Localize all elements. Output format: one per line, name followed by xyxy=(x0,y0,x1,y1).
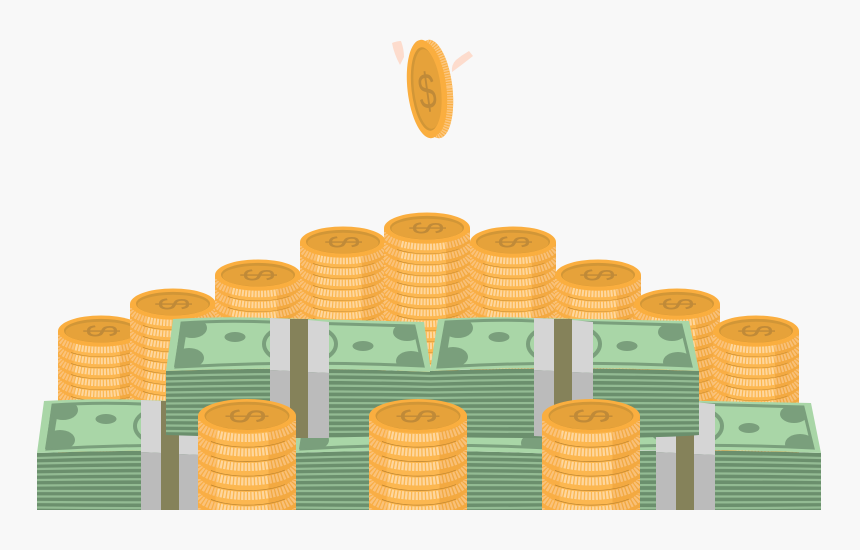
coin stack 1: $ xyxy=(76,325,126,337)
coin edge xyxy=(410,38,458,140)
coin stack 2 xyxy=(130,288,216,451)
coin stack 6 xyxy=(470,226,556,389)
coin inner ring xyxy=(407,46,445,132)
icon: flipping coin xyxy=(392,38,473,140)
coin stack 9: $ xyxy=(731,325,781,337)
coin stack 3 xyxy=(215,260,301,422)
coin stack 5 centre: $ xyxy=(402,222,452,234)
front coin stack left: $ xyxy=(218,409,276,423)
front coin stack middle xyxy=(369,399,467,549)
front coin stack right xyxy=(542,399,640,549)
front coin stack middle: $ xyxy=(389,409,447,423)
front coin stack right: $ xyxy=(562,409,620,423)
coin inner face xyxy=(410,48,445,130)
coin stack 3: $ xyxy=(233,269,283,281)
coin stack 4: $ xyxy=(318,236,368,248)
banknote bundle lower left xyxy=(37,399,302,520)
coin edge ridges xyxy=(426,40,453,138)
dollar sign on flipping coin: $ xyxy=(415,62,439,120)
coin stack 5 centre xyxy=(384,212,470,375)
back coin stacks xyxy=(58,212,799,478)
coin stack 8: $ xyxy=(652,298,702,310)
sparkle left xyxy=(392,41,404,65)
coin face xyxy=(402,38,450,140)
coin stack 8 xyxy=(634,288,720,451)
banknote bundle lower right xyxy=(552,399,821,520)
coin stack 7 xyxy=(555,260,641,422)
banknote bundle lower middle xyxy=(291,399,556,520)
coin stack 6: $ xyxy=(488,236,538,248)
front coin stack left xyxy=(198,399,296,549)
sparkle right xyxy=(452,51,473,72)
coin stack 4 xyxy=(300,226,386,389)
banknote bundle upper right xyxy=(430,317,699,438)
coin stack 2: $ xyxy=(148,298,198,310)
coin stack 9 xyxy=(713,316,799,478)
front coin stacks xyxy=(198,399,640,549)
coin stack 7: $ xyxy=(573,269,623,281)
banknote bundle upper left xyxy=(166,317,431,438)
coin stack 1 xyxy=(58,316,144,478)
